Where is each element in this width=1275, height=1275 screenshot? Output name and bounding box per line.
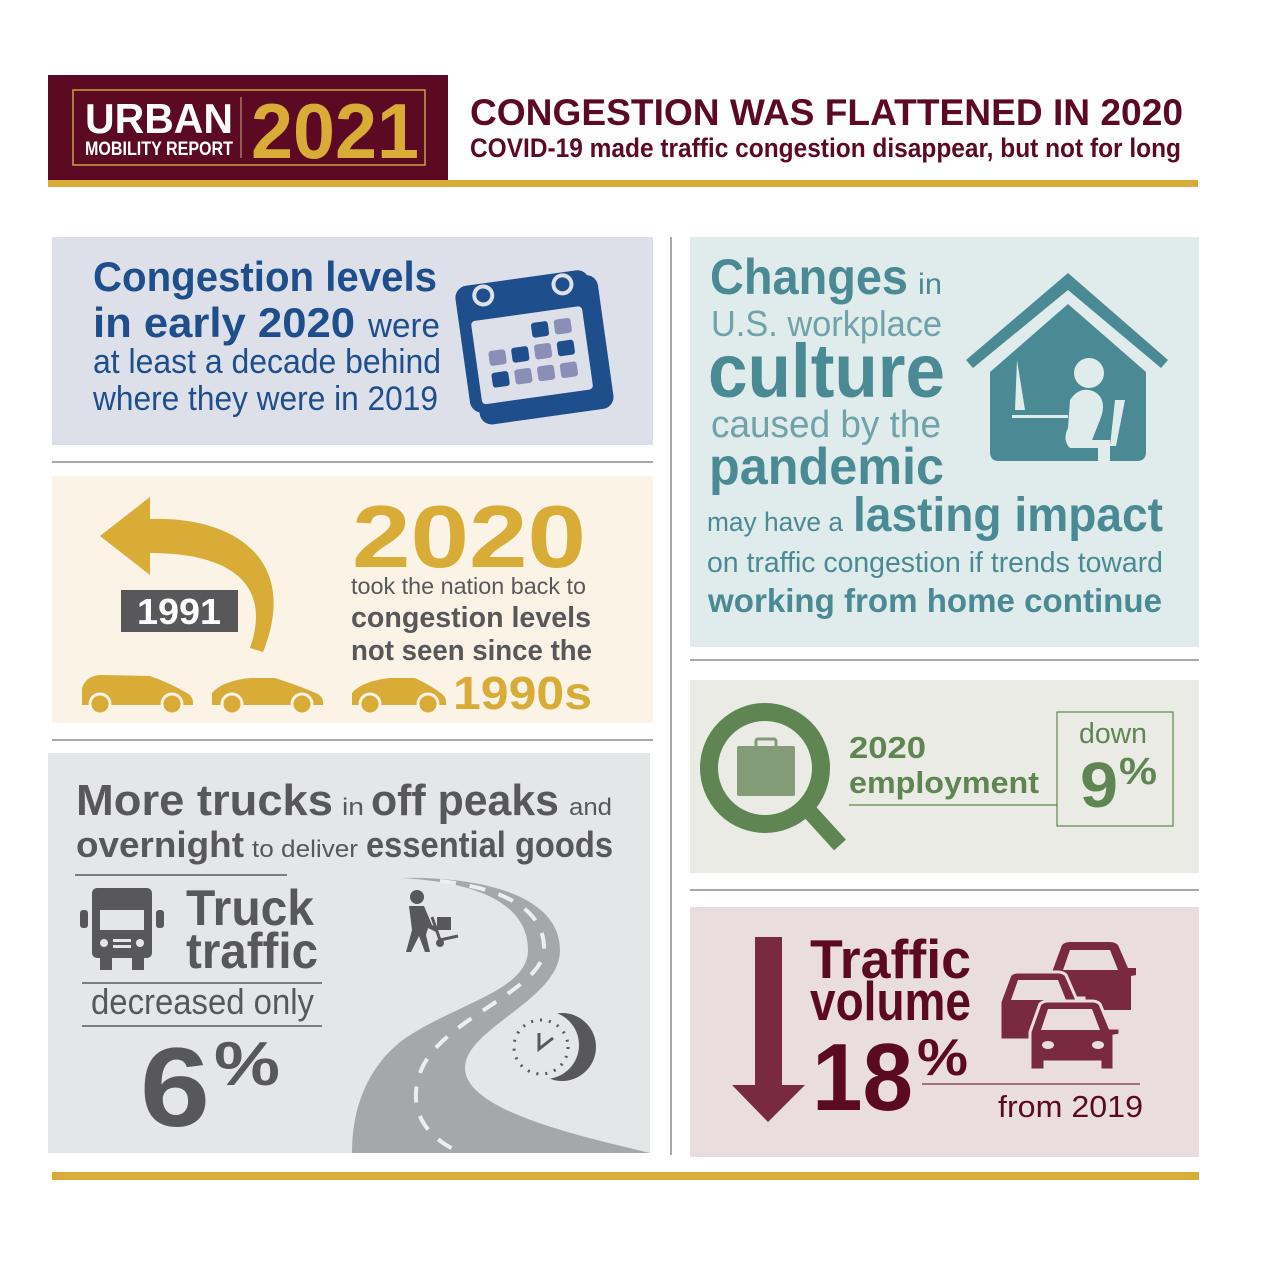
label: 1991 [121,590,238,632]
text: 2020 employment down 9% [849,712,1173,826]
text: traffic volume 18%: Traffic [810,928,971,990]
text: workplace culture: lasting impact [853,489,1163,542]
panel: employment [690,680,1199,873]
text: 2020 employment down 9%: % [1119,751,1157,793]
text: traffic volume 18%: 18 [812,1024,913,1131]
text: more trucks heading: to deliver [252,836,358,863]
text: traffic volume 18%: % [917,1029,968,1087]
header logo block: MOBILITY REPORT [85,139,233,160]
text: 2020 took the nation back: not seen since the [351,635,592,667]
text: truck traffic decreased only 6%: Truck [186,880,314,936]
icon: delivery person [406,890,458,952]
title [470,92,1183,163]
text: truck traffic decreased only 6%: decreased only [91,981,314,1022]
text: congestion levels: at least a decade behind [93,343,441,381]
icon: clock and moon [511,1011,596,1081]
icon: curved back arrow [100,497,274,652]
text: congestion levels [92,253,441,418]
icon: home office [966,273,1168,461]
text: more trucks heading: overnight [76,824,244,865]
text: 2020 took the nation back: took the nation back to [351,573,586,599]
text: traffic volume 18%: volume [810,970,971,1032]
text: 2020 employment down 9%: employment [849,765,1039,800]
panel: 2020 back to 1990s [52,476,653,723]
icon: calendar [454,268,615,427]
panel: traffic volume [690,907,1199,1157]
text: more trucks heading: off peaks [371,776,559,825]
text: workplace culture: in [918,268,942,301]
text: 2020 employment down 9%: down [1079,718,1147,750]
icon: truck [80,888,164,970]
text: 2020 took the nation back: 1990s [453,667,592,719]
icon: three cars [1000,942,1136,1070]
panel: congestion levels [52,237,653,445]
text: truck traffic decreased only 6%: 6 [140,1025,210,1150]
text: congestion levels: were [367,307,440,345]
text: traffic volume 18%: from 2019 [998,1089,1143,1124]
header logo block: 2021 [251,87,419,175]
icon: down arrow [732,937,805,1122]
text: more trucks heading: in [342,794,364,821]
text: more trucks heading [76,776,613,865]
text: 2020 took the nation back: congestion levels [351,602,591,634]
header logo block: URBAN [85,95,233,142]
text: workplace culture: working from home continue [707,582,1162,619]
text: 2020 employment down 9%: 2020 [849,730,926,765]
title: CONGESTION WAS FLATTENED IN 2020 [470,92,1183,133]
text: 2020 employment down 9%: 9 [1080,749,1118,821]
text: workplace culture: pandemic [709,438,944,496]
text: workplace culture: caused by the [711,404,941,446]
header logo block [48,75,448,181]
text: congestion levels: where they were in 2019 [92,380,438,418]
text: 2020 took the nation back [351,487,592,719]
text: workplace culture: U.S. workplace [711,303,942,344]
text: workplace culture: Changes [710,249,908,305]
icon: road [352,878,650,1153]
text: workplace culture: may have a [707,507,844,537]
text: workplace culture: on traffic congestion if trends toward [707,547,1163,579]
text: truck traffic decreased only 6%: traffic [186,923,318,979]
label: 1991: 1991 [137,591,221,632]
text: 2020 took the nation back: 2020 [352,487,586,586]
text: traffic volume 18% [810,928,1143,1131]
panel: trucks [48,753,650,1153]
icon: magnifier with briefcase [709,712,840,845]
text: congestion levels: in early 2020 [93,299,355,346]
text: truck traffic decreased only 6% [91,880,318,1150]
title: COVID-19 made traffic congestion disappear, but not for long [470,133,1181,163]
icon: cars [82,675,446,714]
text: congestion levels: Congestion levels [93,253,437,300]
text: more trucks heading: More trucks [76,776,333,825]
text: workplace culture [707,249,1163,619]
text: workplace culture: culture [708,329,945,414]
text: more trucks heading: and [569,794,612,821]
text: more trucks heading: essential goods [366,824,613,865]
panel: workplace culture [690,237,1199,647]
text: truck traffic decreased only 6%: % [214,1030,280,1099]
